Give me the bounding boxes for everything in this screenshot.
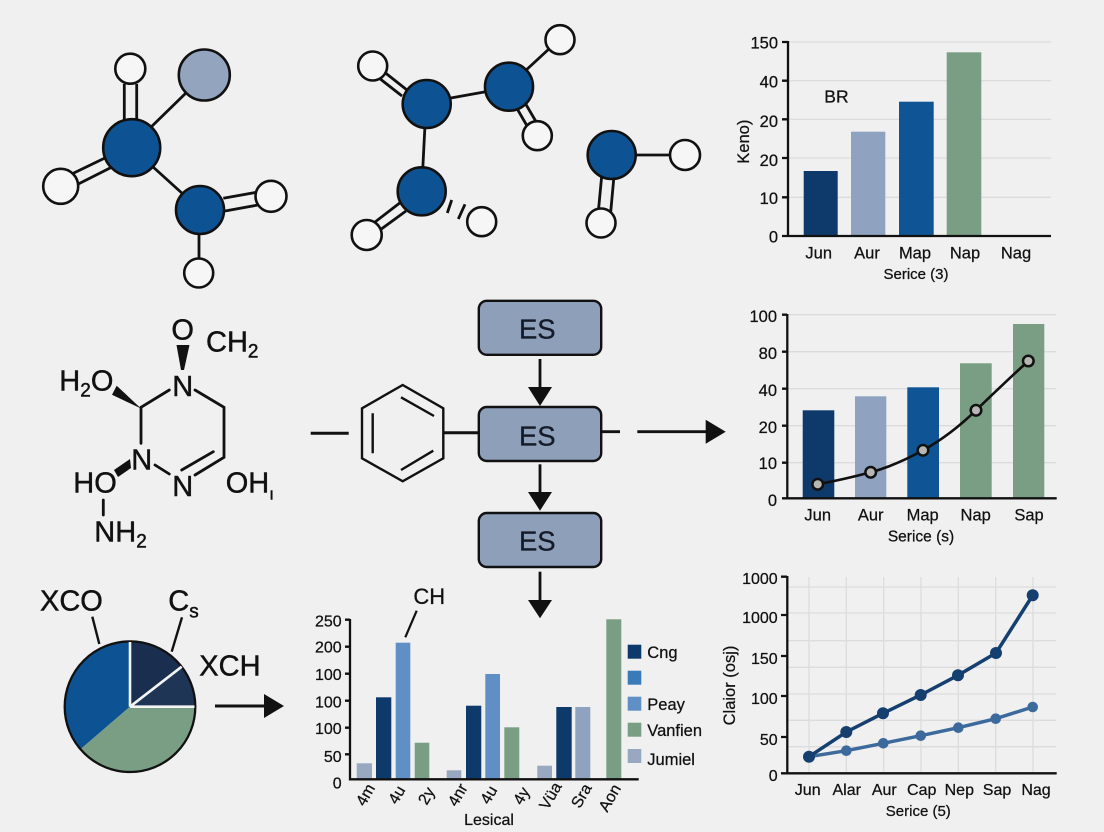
bar chart: top right: 20 <box>760 152 778 170</box>
molecule: branched structure top centre <box>352 25 574 250</box>
chemical structure: ring with substituents: 2 <box>248 342 258 363</box>
bar chart: top right: Aur <box>854 245 880 263</box>
combo chart: bars with line: 100 <box>749 308 777 326</box>
process box: top ES <box>479 301 601 355</box>
line chart: two series: Aur <box>872 782 897 799</box>
line chart: two series: Nep <box>945 782 974 799</box>
bar chart: top right: BR <box>824 87 849 107</box>
process box: middle ES: ES <box>519 420 556 451</box>
arrow: top ES to middle ES <box>528 359 552 406</box>
connector: dash left of benzene <box>311 432 349 435</box>
combo chart: bars with line: 40 <box>759 382 777 400</box>
combo chart: bars with line: 0 <box>768 492 777 510</box>
grouped bar chart: 50 <box>324 749 342 766</box>
chemical structure: ring with substituents: N <box>172 471 193 503</box>
arrow: middle ES to bottom ES <box>528 464 552 511</box>
line chart: two series: Serice (5) <box>886 803 951 820</box>
connector: benzene to process box <box>443 431 478 434</box>
grouped bar chart: 100 <box>315 667 342 684</box>
arrow: middle ES to combo chart <box>602 420 726 444</box>
combo chart: bars with line: Sap <box>1014 507 1044 525</box>
grouped bar chart: 4u <box>478 783 501 807</box>
line chart: two series: Jun <box>795 782 821 799</box>
arrow: pie to grouped bars <box>215 694 284 718</box>
grouped bar chart: 100 <box>315 721 342 738</box>
bar chart: top right: Jun <box>805 245 832 263</box>
arrow: bottom ES downward <box>528 572 552 618</box>
molecule: four-carbon cluster top left <box>43 50 287 288</box>
grouped bar chart: Sra <box>569 781 596 811</box>
grouped bar chart: 250 <box>315 614 342 631</box>
line chart: two series: Sap <box>983 782 1011 799</box>
pie chart with labels: XCH <box>199 651 261 683</box>
legend: grouped bar chart: Cng <box>647 644 678 662</box>
bar chart: top right: Serice (3) <box>883 266 949 283</box>
process box: top ES: ES <box>519 314 556 345</box>
grouped bar chart: Lesical <box>464 812 514 829</box>
grouped bar chart: Aon <box>596 782 625 815</box>
grouped bar chart: CH <box>413 584 445 609</box>
grouped bar chart: 4nr <box>445 780 472 810</box>
bar chart: top right: 10 <box>760 190 778 208</box>
pie chart with labels: XCO <box>40 586 103 618</box>
molecule: small triad <box>586 131 700 238</box>
pie chart with labels <box>40 586 261 772</box>
line chart: two series: 100 <box>751 691 778 708</box>
grouped bar chart: 200 <box>315 640 342 657</box>
combo chart: bars with line: 10 <box>759 455 777 473</box>
bar chart: top right: 150 <box>750 35 778 53</box>
process box: middle ES <box>479 407 601 461</box>
line chart: two series <box>721 571 1057 820</box>
combo chart: bars with line: 20 <box>759 419 777 437</box>
chemical structure: ring with substituents: CH <box>206 327 248 359</box>
chemical structure: ring with substituents: NH <box>94 517 136 549</box>
grouped bar chart: 4y <box>511 785 534 808</box>
line chart: two series: 150 <box>751 651 778 668</box>
grouped bar chart: 4u <box>386 783 409 807</box>
bar chart: top right: Nap <box>950 245 980 263</box>
line chart: two series: Alar <box>832 782 862 799</box>
legend: grouped bar chart: Peay <box>647 696 686 714</box>
grouped bar chart: 100 <box>315 695 342 712</box>
legend: grouped bar chart <box>628 644 702 769</box>
combo chart: bars with line: Jun <box>804 507 831 525</box>
line chart: two series: Claior (osj) <box>721 646 739 725</box>
line chart: two series: 1000 <box>742 610 778 627</box>
combo chart: bars with line: Map <box>907 507 939 525</box>
bar chart: top right <box>735 35 1051 283</box>
chemical structure: ring with substituents: OH <box>226 468 269 500</box>
chemical structure: ring with substituents: HO <box>73 468 117 500</box>
line chart: two series: 1000 <box>742 571 778 588</box>
grouped bar chart: 0 <box>333 776 342 793</box>
chemical structure: ring with substituents: 2 <box>136 532 147 553</box>
grouped bar chart: 4m <box>353 781 379 809</box>
chemical structure: ring with substituents: O <box>171 314 194 346</box>
legend: grouped bar chart: Jumiel <box>647 751 695 769</box>
chemical structure: ring with substituents: H <box>59 366 80 398</box>
legend: grouped bar chart: Vanfien <box>647 722 702 740</box>
process box: bottom ES: ES <box>519 526 556 557</box>
grouped bar chart: Vüa <box>537 780 566 813</box>
line chart: two series: Cap <box>907 782 936 799</box>
bar chart: top right: Nag <box>1001 245 1031 263</box>
bar chart: top right: 0 <box>769 229 778 247</box>
chemical structure: ring with substituents: ı <box>269 485 274 504</box>
bar chart: top right: 40 <box>760 74 778 92</box>
process box: bottom ES <box>479 513 601 567</box>
combo chart: bars with line <box>749 308 1057 546</box>
combo chart: bars with line: Aur <box>858 507 884 525</box>
pie chart with labels: C <box>168 586 189 618</box>
chemical structure: ring with substituents: 2 <box>80 381 91 402</box>
combo chart: bars with line: Serice (s) <box>888 529 954 546</box>
pie chart with labels: s <box>189 602 199 623</box>
bar chart: top right: Keno) <box>735 120 753 164</box>
bar chart: top right: Map <box>899 245 931 263</box>
grouped bar chart <box>315 584 639 829</box>
line chart: two series: Nag <box>1021 782 1051 799</box>
line chart: two series: 50 <box>760 732 778 749</box>
icon: benzene ring <box>362 385 443 481</box>
chemical structure: ring with substituents <box>59 314 274 553</box>
grouped bar chart: 2y <box>416 785 439 808</box>
chemical structure: ring with substituents: N <box>131 444 152 476</box>
chemical structure: ring with substituents: N <box>172 371 193 403</box>
combo chart: bars with line: 80 <box>759 345 777 363</box>
combo chart: bars with line: Nap <box>961 507 991 525</box>
bar chart: top right: 20 <box>760 113 778 131</box>
chemical structure: ring with substituents: O <box>91 366 113 398</box>
line chart: two series: 0 <box>769 768 778 785</box>
